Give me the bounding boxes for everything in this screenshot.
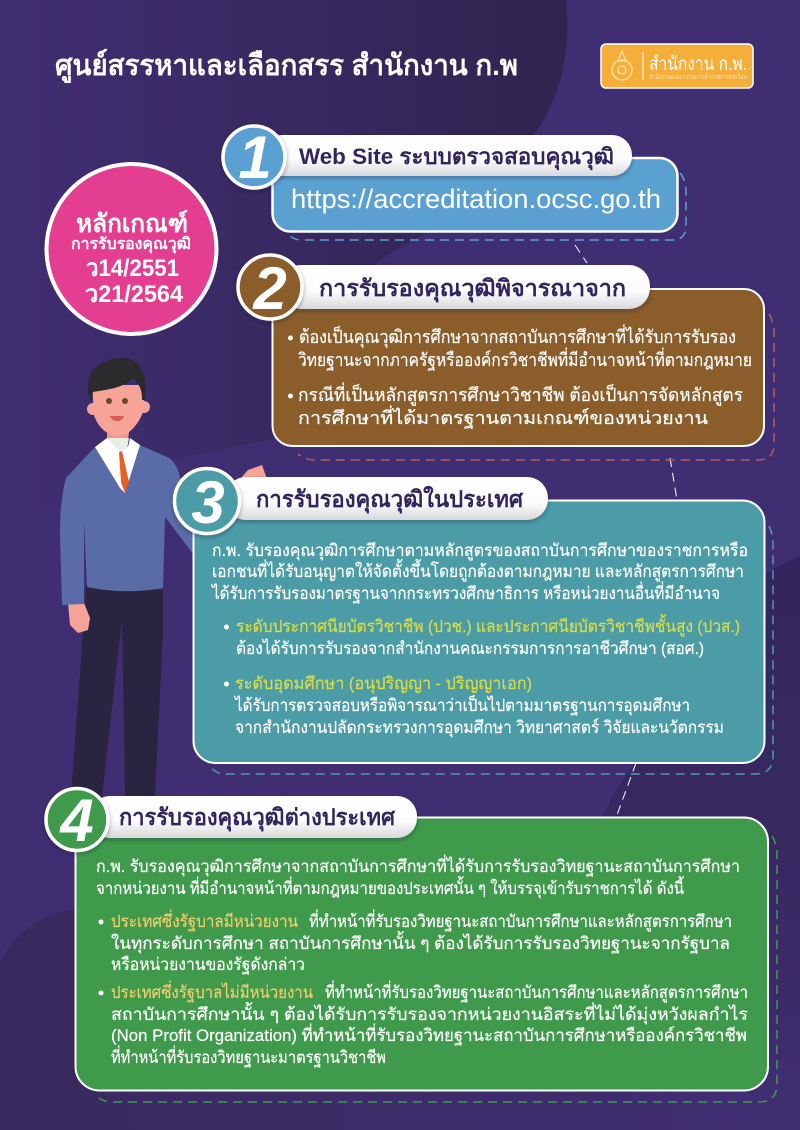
number badge 1 (223, 124, 285, 191)
panel 2 text: ต้องเป็นคุณวุฒิการศึกษาจากสถาบันการศึกษาที่ได้รับการรับรอง (299, 324, 736, 348)
legs (71, 585, 163, 796)
panel 4 text: จากหน่วยงาน ที่มีอำนาจหน้าที่ตามกฎหมายของประเทศนั้น ๆ ให้บรรจุเข้ารับราชการได้ ดังนี้ (96, 876, 684, 899)
panel 4 text: ประเทศซึ่งรัฐบาลไม่มีหน่วยงาน (111, 980, 313, 1003)
panel 2: criteria (238, 255, 774, 460)
logo: OCSC (601, 44, 753, 88)
icon: seal (612, 51, 632, 80)
panel 3 text (210, 541, 748, 738)
panel 3 text: เอกชนที่ได้รับอนุญาตให้จัดตั้งขึ้นโดยถูกต้องตามกฎหมาย และหลักสูตรการศึกษา (212, 559, 744, 582)
panel 3 text: จากสำนักงานปลัดกระทรวงการอุดมศึกษา วิทยาศาสตร์ วิจัยและนวัตกรรม (235, 718, 724, 738)
panel 3: domestic: การรับรองคุณวุฒิในประเทศ (256, 485, 523, 514)
panel 4 text: ประเทศซึ่งรัฐบาลมีหน่วยงาน (111, 909, 298, 932)
panel 4: foreign: การรับรองคุณวุฒิต่างประเทศ (119, 804, 395, 832)
panel 3: domestic (174, 468, 773, 774)
panel 3 text: ระดับอุดมศึกษา (อนุปริญญา - ปริญญาเอก) (235, 674, 532, 694)
panel 1: web site: Web Site ระบบตรวจสอบคุณวุฒิ (299, 144, 614, 171)
title: ศูนย์สรรหาและเลือกสรร สำนักงาน ก.พ (55, 48, 518, 83)
logo: OCSC: สำนักงานคณะกรรมการข้าราชการพลเรือน (649, 73, 747, 81)
pink badge: criteria: ว21/2564 (85, 281, 184, 308)
pink badge: criteria: ว14/2551 (86, 255, 179, 282)
panel 4 text: ที่ทำหน้าที่รับรองวิทยฐานะสถาบันการศึกษาและหลักสูตรการศึกษา (325, 980, 748, 1003)
header pill (280, 265, 650, 309)
panel 4 text: ที่ทำหน้าที่รับรองวิทยฐานะสถาบันการศึกษาและหลักสูตรการศึกษา (309, 909, 732, 932)
sweater and arms (60, 445, 200, 605)
number badge 2: 2 (252, 255, 287, 322)
illustration: man in blue sweater (60, 358, 267, 796)
pink badge: criteria: การรับรองคุณวุฒิ (71, 235, 191, 254)
panel 3 text: ได้รับการตรวจสอบหรือพิจารณาว่าเป็นไปตามมาตรฐานการอุดมศึกษา (233, 694, 690, 716)
header pill (90, 796, 417, 838)
connector lines (575, 245, 677, 815)
number badge 3 (174, 468, 240, 536)
panel 4: foreign (46, 787, 777, 1102)
panel 1: web site (223, 124, 686, 240)
pink badge: criteria: หลักเกณฑ์ (76, 209, 188, 238)
panel 4 text: สถาบันการศึกษานั้น ๆ ต้องได้รับการรับรองจากหน่วยงานอิสระที่ไม่ได้มุ่งหวังผลกำไร (111, 1002, 748, 1025)
header pill (225, 477, 548, 520)
number badge 4: 4 (59, 787, 94, 854)
ears (87, 403, 99, 415)
panel 3 text: ระดับประกาศนียบัตรวิชาชีพ (ปวช.) และประกาศนียบัตรวิชาชีพชั้นสูง (ปวส.) (236, 614, 740, 637)
panel 3 text: ก.พ. รับรองคุณวุฒิการศึกษาตามหลักสูตรของสถาบันการศึกษาของราชการหรือ (212, 541, 748, 561)
raised hand (240, 465, 267, 479)
number badge 2 (238, 255, 302, 322)
panel 4 text: ที่ทำหน้าที่รับรองวิทยฐานะมาตรฐานวิชาชีพ (111, 1045, 386, 1068)
panel 4 text: ในทุกระดับการศึกษา สถาบันการศึกษานั้น ๆ ต้องได้รับการรับรองวิทยฐานะจากรัฐบาล (111, 931, 730, 954)
panel 3 text: ได้รับการรับรองมาตรฐานจากกระทรวงศึกษาธิการ หรือหน่วยงานอื่นที่มีอำนาจ (210, 581, 720, 604)
url: https://accreditation.ocsc.go.th (291, 184, 661, 214)
header pill (262, 135, 632, 176)
shirt collar (95, 438, 140, 493)
mouth (110, 416, 124, 421)
panel 4 text: (Non Profit Organization) ที่ทำหน้าที่รับรองวิทยฐานะสถาบันการศึกษาหรือองค์กรวิชาชีพ (111, 1023, 747, 1046)
panel 2: criteria: การรับรองคุณวุฒิพิจารณาจาก (319, 275, 626, 303)
logo: OCSC: สำนักงาน ก.พ. (649, 54, 747, 75)
panel 4 text: หรือหน่วยงานของรัฐดังกล่าว (111, 955, 305, 975)
eyes (106, 398, 112, 404)
number badge 3: 3 (191, 469, 225, 536)
panel 2 text: การศึกษาที่ได้มาตรฐานตามเกณฑ์ของหน่วยงาน (298, 405, 708, 429)
tie (119, 451, 129, 493)
panel 2 text: กรณีที่เป็นหลักสูตรการศึกษาวิชาชีพ ต้องเป็นการจัดหลักสูตร (298, 382, 743, 406)
panel 4 text (96, 854, 748, 1068)
face (92, 385, 145, 436)
panel 4 text: ก.พ. รับรองคุณวุฒิการศึกษาจากสถาบันการศึกษาที่ได้รับการรับรองวิทยฐานะสถาบันการศึกษา (96, 854, 740, 877)
number badge 4 (46, 787, 108, 854)
panel 3 text: ต้องได้รับการรับรองจากสำนักงานคณะกรรมการการอาชีวศึกษา (สอศ.) (236, 638, 704, 658)
hand low (68, 603, 90, 633)
neck (107, 425, 130, 447)
pink badge: criteria (46, 164, 216, 334)
hair (88, 358, 146, 401)
panel 2 text (288, 324, 752, 429)
number badge 1: 1 (238, 124, 272, 191)
